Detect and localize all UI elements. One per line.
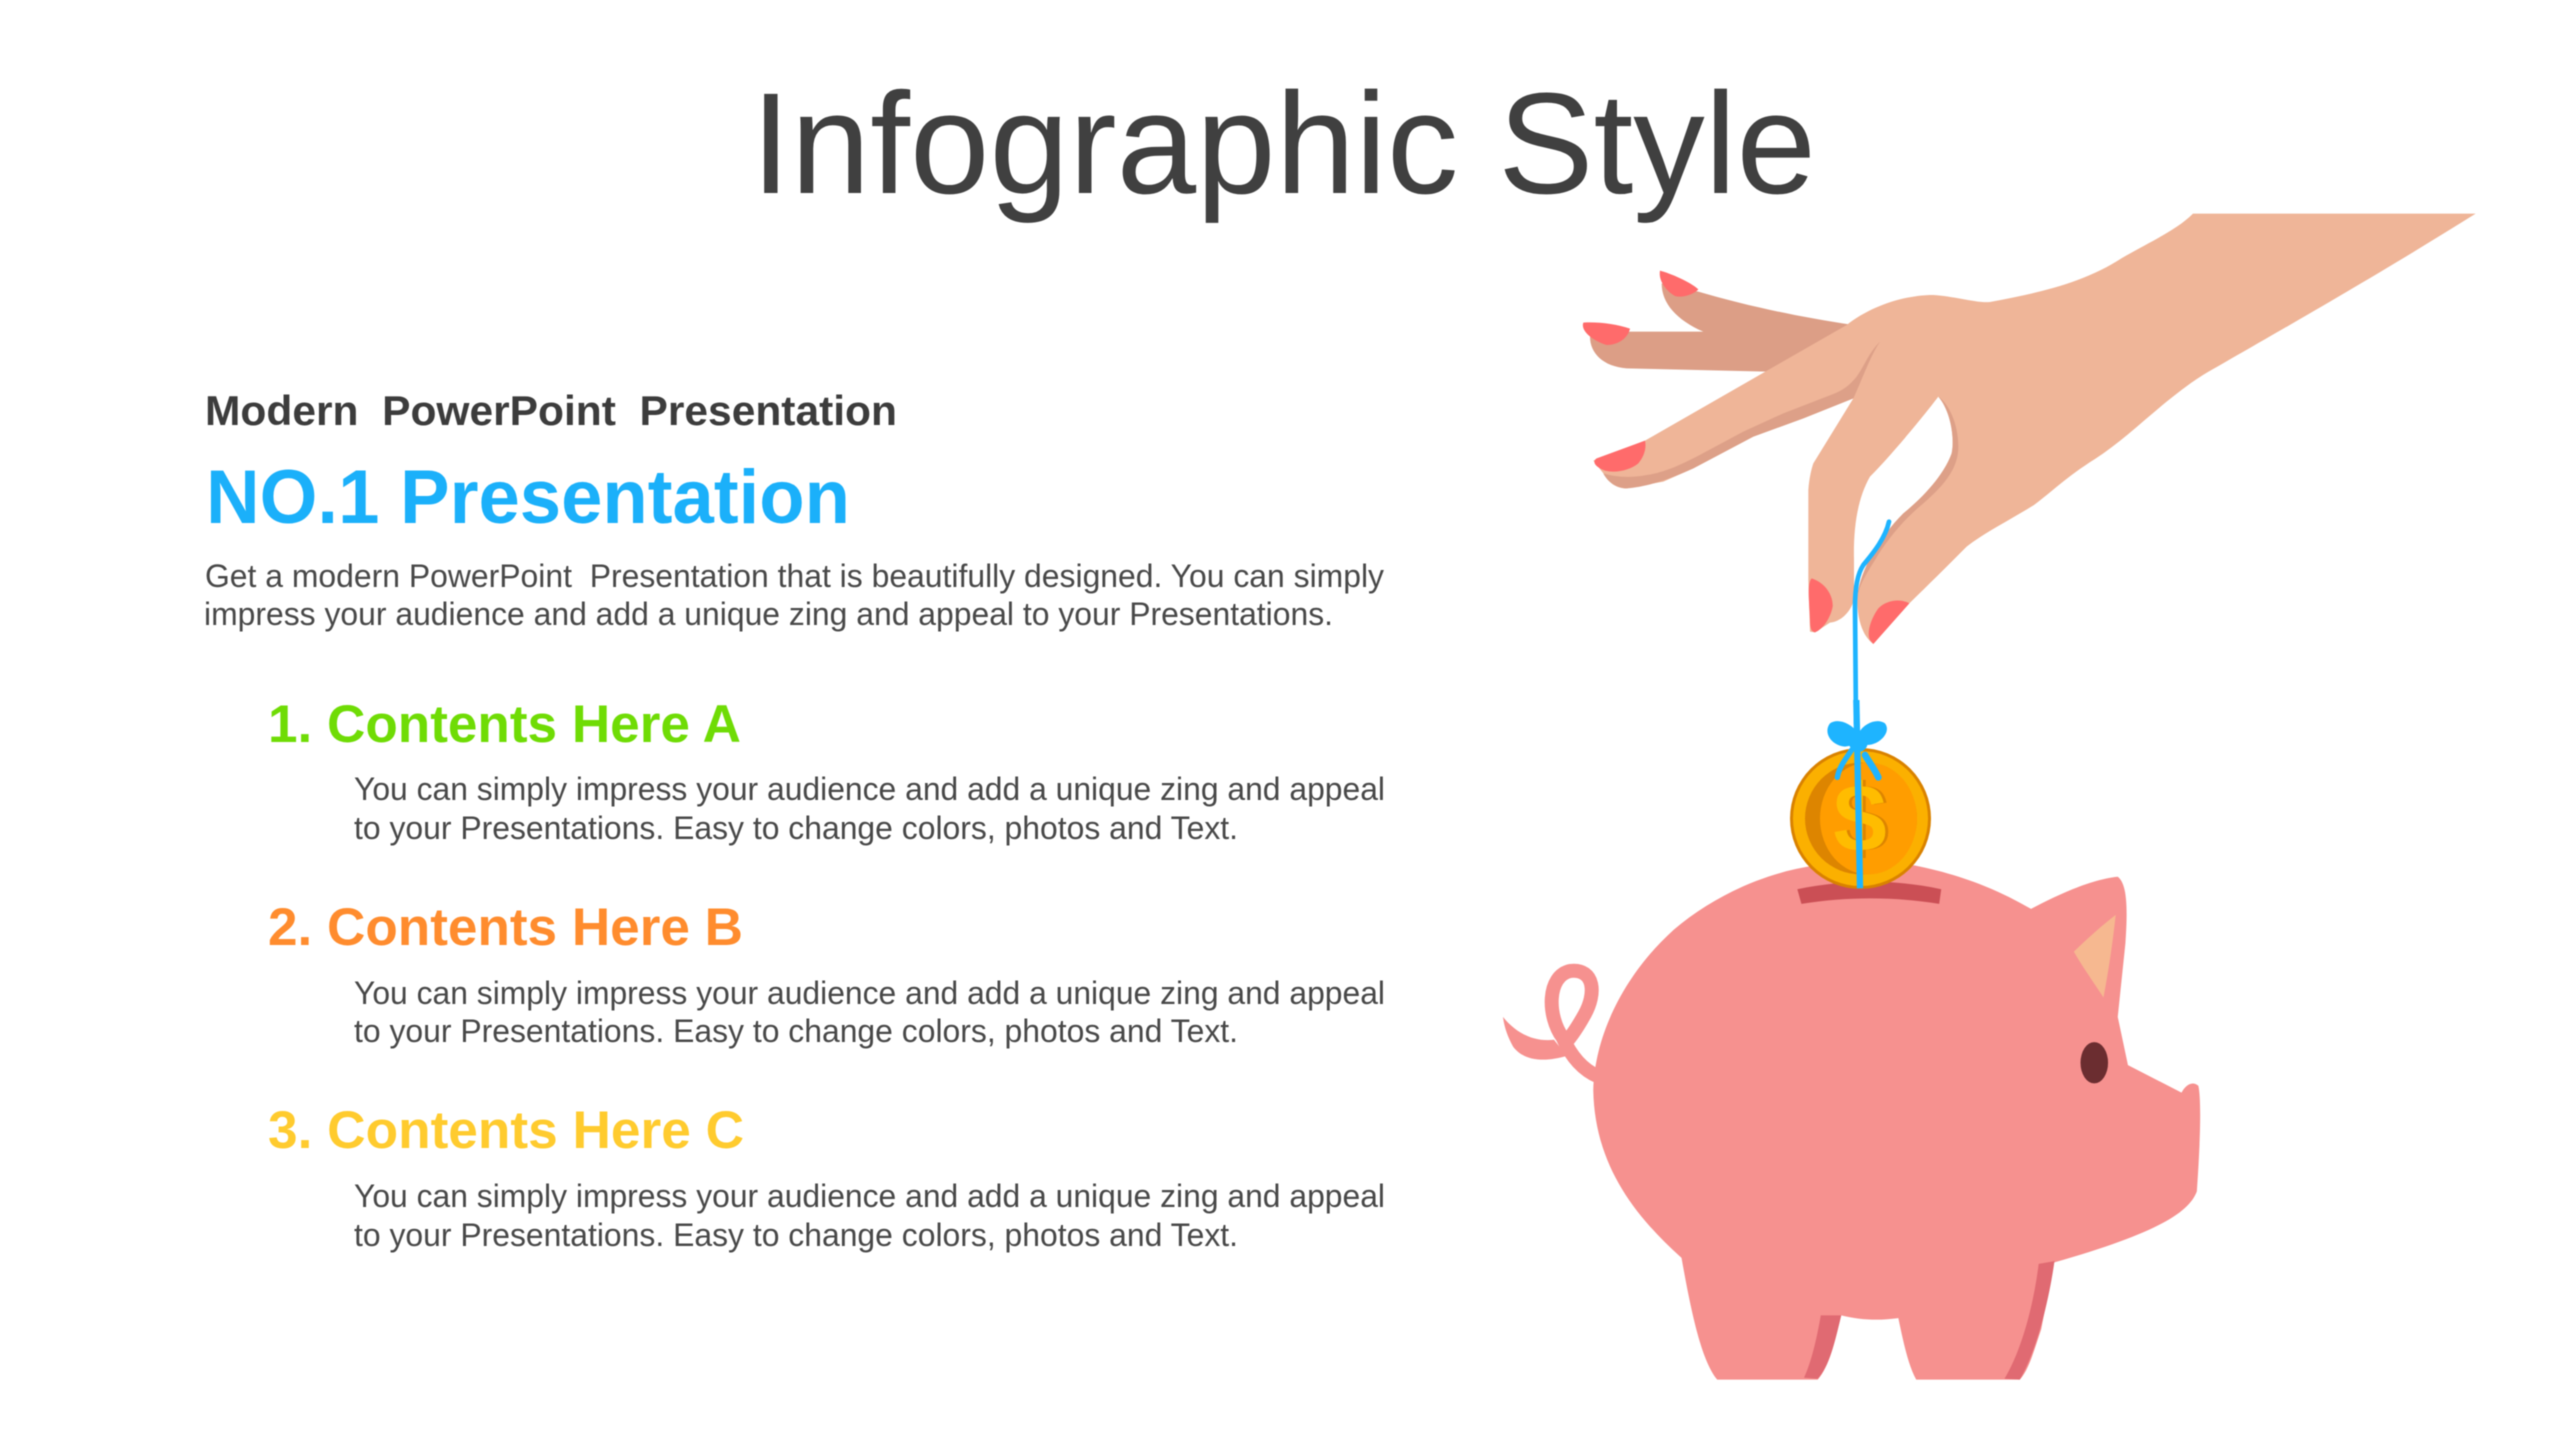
item 1 body: You can simply impress your audience and add a unique zing and appeal [354,771,1385,807]
item 2 heading: 2. Contents Here B [268,898,743,957]
item 2 body [354,975,1385,1049]
intro paragraph [204,558,1384,632]
item 2 [268,898,1385,1049]
pig body [1593,865,2200,1380]
illustration: hand [1583,214,2476,723]
thumb shadow [1857,397,1958,597]
ribbon bow [1827,700,1887,888]
intro paragraph: impress your audience and add a unique zing and appeal to your Presentations. [204,596,1333,632]
item 3 body: to your Presentations. Easy to change colors, photos and Text. [354,1217,1238,1253]
item 1 body: to your Presentations. Easy to change colors, photos and Text. [354,810,1238,846]
index finger shadow [1603,342,1880,488]
coin slot [1797,882,1941,904]
pig eye [2081,1042,2108,1083]
back finger nails [1583,271,1698,345]
dollar sign: $ [1833,765,1887,872]
item 1 body [354,771,1385,846]
heading: NO.1 Presentation: NO.1 Presentation [206,455,850,540]
hand nails [1594,441,1909,644]
item 3 heading: 3. Contents Here C [268,1101,744,1160]
hand and arm [1593,214,2476,644]
pig tail [1503,971,1598,1077]
item 2 body: You can simply impress your audience and add a unique zing and appeal [354,975,1385,1011]
intro paragraph: Get a modern PowerPoint Presentation that is beautifully designed. You can simply [205,558,1384,594]
string [1855,522,1889,723]
pig leg shading [1804,1261,2054,1380]
item 3 body [354,1178,1385,1253]
item 1 [268,695,1385,846]
coin [1790,748,1931,889]
panel: text column [204,387,1385,1253]
illustration: piggy bank [1503,865,2200,1380]
item 3 body: You can simply impress your audience and add a unique zing and appeal [354,1178,1385,1214]
dollar sign shadow: $ [1836,765,1890,872]
pig ear inner [2074,915,2116,998]
item 3 [268,1101,1385,1253]
item 1 heading: 1. Contents Here A [268,695,741,754]
title: Infographic Style [751,63,1816,224]
subtitle: Modern PowerPoint Presentation [205,387,897,434]
item 2 body: to your Presentations. Easy to change colors, photos and Text. [354,1013,1238,1049]
back fingers [1590,283,1853,372]
